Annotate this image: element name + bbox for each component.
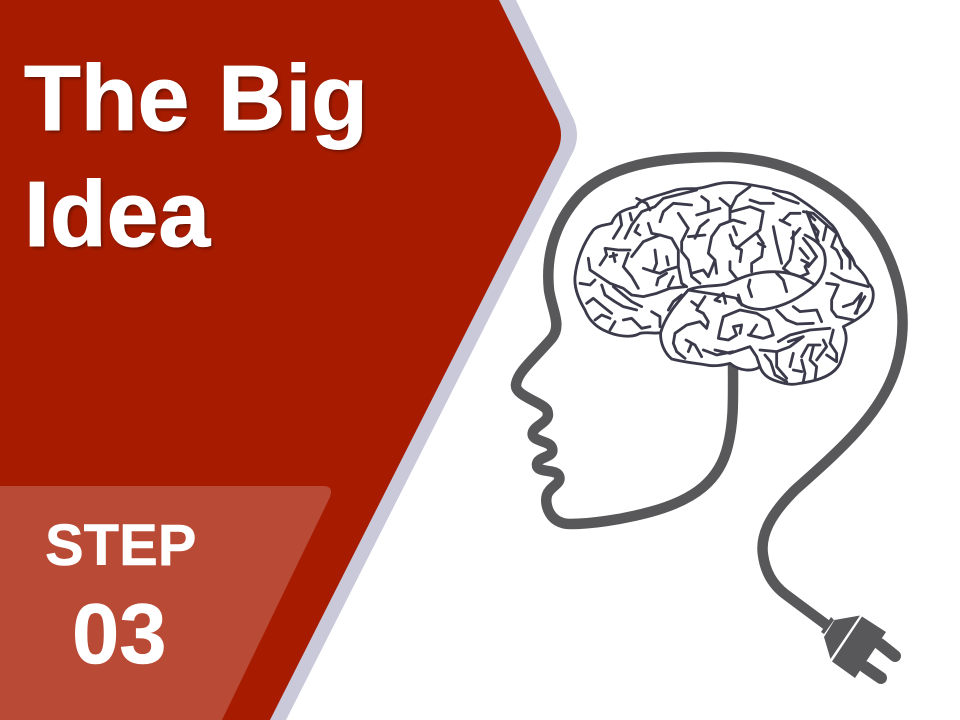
occipital folds [738, 225, 868, 320]
major folds [661, 235, 825, 333]
title [24, 46, 368, 266]
title: The Big [24, 46, 368, 150]
parietal folds [730, 187, 798, 272]
brain outline [575, 183, 873, 384]
arrow shadow [0, 0, 577, 720]
step number: 03 [72, 587, 167, 682]
brain illustration [575, 183, 873, 384]
head outline and power cord [516, 157, 903, 626]
step panel [0, 486, 331, 720]
temporal lobe folds [673, 293, 773, 367]
red arrow panel [0, 0, 561, 720]
title: Idea [24, 162, 210, 266]
icon: plug [821, 616, 895, 678]
step label: STEP [45, 513, 196, 578]
frontal lobe folds [580, 258, 685, 330]
